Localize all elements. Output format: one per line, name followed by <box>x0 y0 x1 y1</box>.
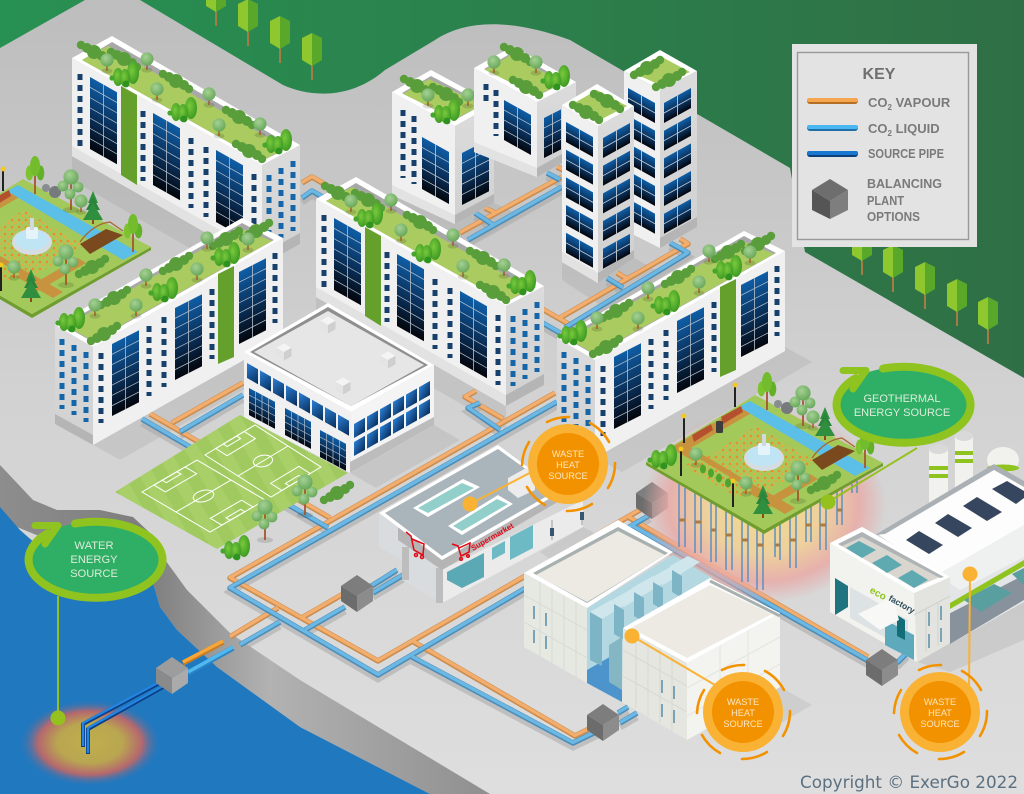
factory <box>830 431 1024 672</box>
water energy source callout <box>27 522 163 726</box>
key panel <box>792 44 977 247</box>
key panel: KEY <box>863 66 896 83</box>
cliff <box>0 465 490 794</box>
waste heat source: data centre <box>624 628 790 759</box>
supermarket: Supermarket <box>470 521 516 553</box>
waste heat source: supermarket: WASTE <box>552 449 584 459</box>
waste heat source: supermarket: SOURCE <box>548 471 588 481</box>
geothermal heat glow <box>642 407 886 603</box>
key panel: OPTIONS <box>867 209 920 224</box>
source pipes in water <box>83 679 170 754</box>
key panel: BALANCING <box>867 176 942 191</box>
key panel: 2 <box>888 103 892 112</box>
park floating <box>646 372 883 534</box>
water heat glow <box>18 699 162 787</box>
CO2 liquid pipes <box>142 172 907 743</box>
pipes shadow <box>142 177 907 747</box>
school building <box>244 303 434 473</box>
waste heat source: factory: WASTE <box>924 697 956 707</box>
tower block A <box>392 70 494 224</box>
water <box>0 507 430 794</box>
building 3 <box>316 177 544 406</box>
waste heat source: data centre: WASTE <box>727 697 759 707</box>
waste heat source: supermarket <box>462 417 615 512</box>
waste heat source: supermarket: HEAT <box>556 460 580 470</box>
trees near pitch <box>220 474 354 560</box>
building 1 <box>72 36 300 265</box>
key panel: SOURCE PIPE <box>868 146 944 161</box>
water energy source callout: SOURCE <box>70 568 118 580</box>
factory: factory <box>887 593 917 616</box>
building ground shadows <box>72 156 812 735</box>
key panel: CO <box>868 121 888 136</box>
waste heat source: data centre: SOURCE <box>723 719 763 729</box>
key panel: VAPOUR <box>892 95 951 110</box>
building 2 <box>55 218 283 445</box>
trees right row <box>852 228 998 344</box>
CO2 vapour pipes <box>150 166 868 736</box>
supermarket <box>379 445 584 603</box>
tower block B <box>474 43 576 177</box>
tower block C <box>562 84 634 283</box>
park legs <box>679 481 857 590</box>
waste heat source: factory: SOURCE <box>920 719 960 729</box>
trees top row <box>206 0 322 80</box>
waste heat source: factory <box>894 566 987 759</box>
water energy source callout: WATER <box>74 540 114 552</box>
building 4 <box>557 231 785 458</box>
riser pipes over cliff <box>183 641 233 673</box>
copyright: Copyright © ExerGo 2022 <box>800 773 1018 793</box>
factory: eco <box>868 585 888 603</box>
key panel: PLANT <box>867 193 904 208</box>
balancing plant boxes <box>156 482 898 741</box>
tower block D <box>624 50 697 248</box>
geothermal energy source callout <box>820 367 971 510</box>
geothermal energy source callout: GEOTHERMAL <box>863 393 941 405</box>
key panel: 2 <box>888 129 892 138</box>
data centre <box>524 520 780 740</box>
waste heat source: data centre: HEAT <box>731 708 755 718</box>
football pitch <box>115 415 348 549</box>
key panel: CO <box>868 95 888 110</box>
geothermal energy source callout: ENERGY SOURCE <box>854 407 950 419</box>
water energy source callout: ENERGY <box>70 554 118 566</box>
key panel: LIQUID <box>892 121 940 136</box>
park top-left <box>0 156 151 318</box>
waste heat source: factory: HEAT <box>928 708 952 718</box>
